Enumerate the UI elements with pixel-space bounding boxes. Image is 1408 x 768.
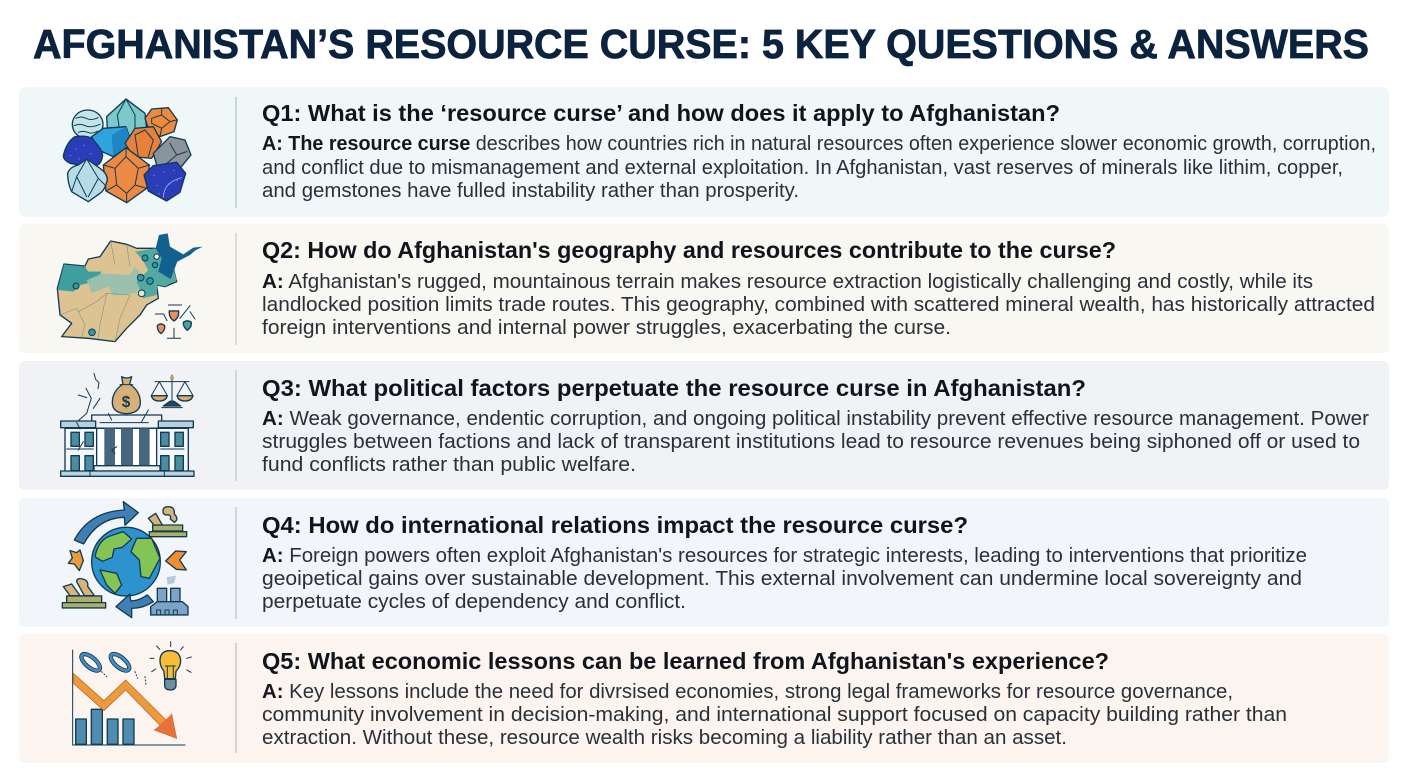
title: AFGHANISTAN’S RESOURCE CURSE: 5 KEY QUESTIONS & ANSWERS (33, 21, 1369, 67)
answer 5: A: Key lessons include the need for divrsised economies, strong legal frameworks for resource governance, (262, 681, 1233, 703)
answer 2: foreign interventions and internal power struggles, exacerbating the curse. (262, 317, 951, 339)
icon: globe with arrows (62, 502, 188, 618)
answer 3 (262, 408, 1369, 476)
answer 4: geoipetical gains over sustainable development. This external involvement can undermine local sovereignty and (262, 568, 1302, 590)
question 4: Q4: How do international relations impact the resource curse? (262, 512, 968, 538)
answer 1 (262, 133, 1376, 202)
panel: Q2 geography (19, 224, 1389, 353)
panel: Q1 resource curse (19, 87, 1389, 217)
answer 4: A: Foreign powers often exploit Afghanistan's resources for strategic interests, leading to interventions that prioritize (262, 545, 1307, 567)
panel: Q3 politics (19, 361, 1389, 490)
icon: cracked government building: $ (122, 394, 131, 411)
icon: gemstones (63, 99, 191, 203)
answer 3: struggles between factions and lack of transparent institutions lead to resource revenues being siphoned off or used to (262, 431, 1360, 453)
icon: cracked government building (61, 373, 194, 476)
answer 4 (262, 545, 1307, 613)
question 5: Q5: What economic lessons can be learned from Afghanistan's experience? (262, 648, 1109, 674)
panel: Q5 economic lessons (19, 634, 1389, 763)
answer 1: and gemstones have fulled instability rather than prosperity. (262, 180, 799, 202)
answer 2: A: Afghanistan's rugged, mountainous terrain makes resource extraction logistically challenging and costly, while its (262, 271, 1313, 293)
answer 1: A: The resource curse describes how countries rich in natural resources often experience slower economic growth, corruption, (262, 133, 1376, 155)
answer 5: community involvement in decision-making, and international support focused on capacity building rather than (262, 704, 1287, 726)
question 2: Q2: How do Afghanistan's geography and resources contribute to the curse? (262, 237, 1116, 263)
answer 3: fund conflicts rather than public welfare. (262, 454, 636, 476)
answer 5 (262, 681, 1287, 749)
answer 5: extraction. Without these, resource wealth risks becoming a liability rather than an asset. (262, 727, 1067, 749)
question 1: Q1: What is the ‘resource curse’ and how does it apply to Afghanistan? (262, 100, 1060, 126)
icon: map of Afghanistan (57, 233, 203, 342)
answer 2 (262, 271, 1375, 339)
question 3: Q3: What political factors perpetuate the resource curse in Afghanistan? (262, 375, 1086, 401)
answer 3: A: Weak governance, endentic corruption, and ongoing political instability prevent effective resource management. Power (262, 408, 1369, 430)
panel: Q4 international relations (19, 498, 1389, 627)
answer 1: and conflict due to mismanagement and external exploitation. In Afghanistan, vast reserves of minerals like lithim, copper, (262, 157, 1343, 179)
icon: falling chart with broken chain and light bulb (73, 642, 191, 745)
answer 2: landlocked position limits trade routes. This geography, combined with scattered mineral wealth, has historically attracted (262, 294, 1375, 316)
answer 4: perpetuate cycles of dependency and conflict. (262, 591, 686, 613)
